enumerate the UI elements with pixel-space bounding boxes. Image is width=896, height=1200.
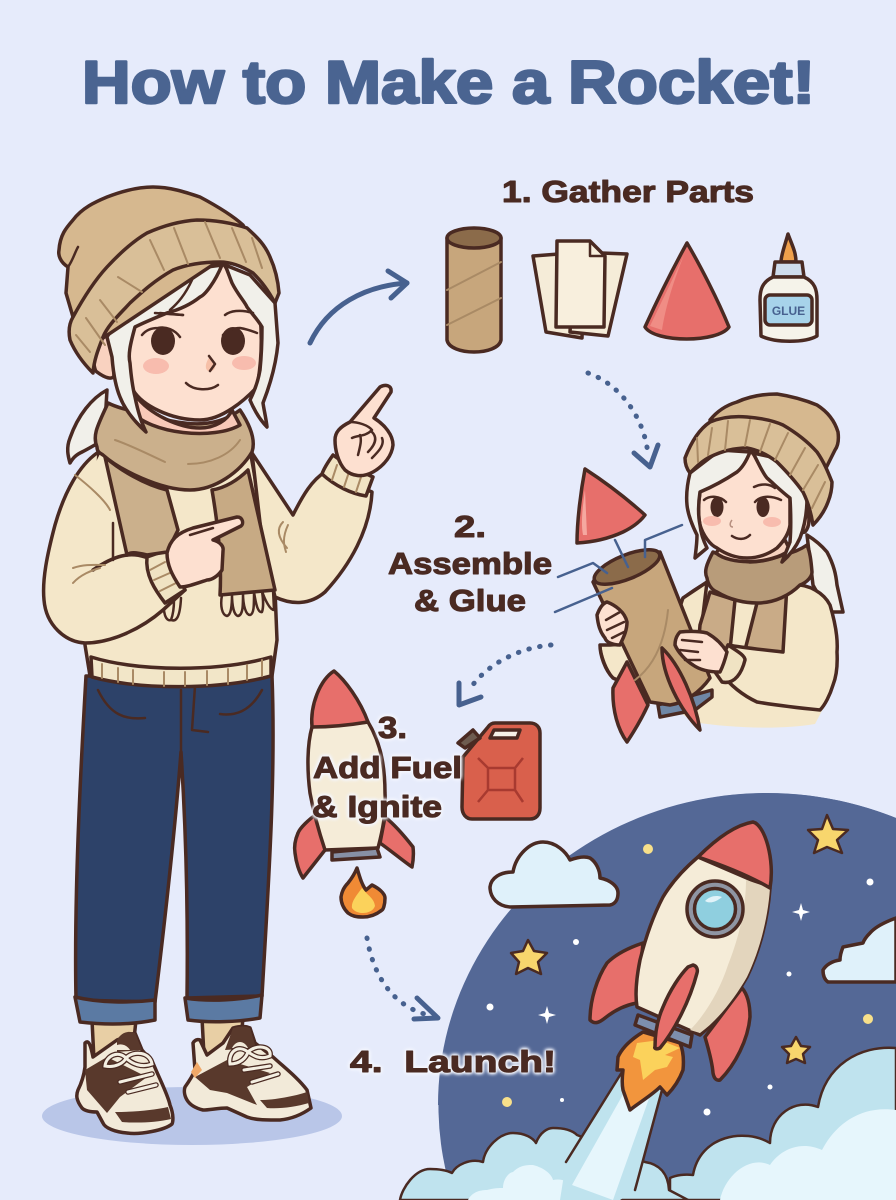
assembly motion lines xyxy=(555,525,682,612)
ground shadow xyxy=(42,1087,342,1145)
small beanie band xyxy=(685,417,832,525)
main character pointing xyxy=(42,187,393,1145)
rocket porthole xyxy=(687,881,743,937)
hand pointing up xyxy=(335,385,393,476)
rocket tube with fins xyxy=(590,543,712,742)
sleeve fold xyxy=(279,522,288,552)
beanie crease xyxy=(68,247,78,267)
icon: cardboard tube xyxy=(447,228,501,352)
heading: step 2: 2. xyxy=(454,509,486,544)
rocket body xyxy=(636,857,770,1035)
left arm xyxy=(44,453,185,643)
small face xyxy=(698,450,790,558)
icon: glue bottle xyxy=(760,234,817,341)
arrow: character to parts xyxy=(310,271,407,343)
small beanie crown xyxy=(710,394,838,470)
rocket nozzle xyxy=(635,1015,692,1047)
sweater hem xyxy=(91,657,271,687)
small ponytail xyxy=(807,535,843,612)
small torso xyxy=(640,585,825,728)
bottom right clouds xyxy=(670,1048,896,1200)
heading: step 1: 1. Gather Parts xyxy=(502,174,754,209)
hair xyxy=(107,265,278,432)
ponytail xyxy=(68,390,107,463)
dotted arrow: assemble to fuel xyxy=(459,645,551,705)
dotted arrow: fuel to launch xyxy=(367,938,438,1019)
hand pointing at self xyxy=(167,517,243,587)
beanie crown xyxy=(59,187,250,340)
icon: flame xyxy=(341,868,385,917)
ear xyxy=(94,335,114,378)
heading: step 4: 4. Launch! xyxy=(350,1044,556,1079)
sweater torso xyxy=(75,450,277,676)
night sky circle xyxy=(438,793,896,1200)
eyes xyxy=(142,311,257,355)
sparkles and dots xyxy=(486,844,874,1116)
rocket exhaust xyxy=(560,1072,662,1200)
rocket flame xyxy=(617,1032,683,1110)
small hanging scarf xyxy=(698,585,790,652)
bottom left clouds xyxy=(400,1128,688,1200)
right cuff xyxy=(322,455,373,496)
scarf xyxy=(95,403,275,616)
heading: step 2: Assemble xyxy=(388,546,552,581)
cloud over circle edge xyxy=(490,842,618,907)
socks xyxy=(92,1018,243,1060)
right cloud xyxy=(823,918,896,982)
heading: step 3: 3. xyxy=(378,710,407,745)
small hands xyxy=(597,602,727,672)
small rocket xyxy=(295,671,413,878)
icon: glue bottle: GLUE xyxy=(772,304,805,318)
right shoe xyxy=(184,1026,311,1120)
icon: red cone xyxy=(645,243,729,339)
body shading xyxy=(690,880,770,1033)
far sleeve outline xyxy=(600,582,707,678)
heading: step 3 xyxy=(312,710,462,824)
rocket right fin xyxy=(705,988,750,1080)
stars xyxy=(511,815,848,1063)
icon: paper sheets xyxy=(533,241,627,338)
neck xyxy=(130,395,240,433)
rocket left fin xyxy=(590,943,643,1023)
big rocket xyxy=(590,822,771,1110)
small cuff xyxy=(715,645,745,682)
face xyxy=(129,262,261,420)
small eyes and mouth xyxy=(703,484,781,539)
small sleeve xyxy=(720,585,837,710)
step 1 parts xyxy=(447,228,817,352)
nose and smile xyxy=(186,356,218,389)
small neck xyxy=(716,540,790,562)
heading: step 3: & Ignite xyxy=(312,789,442,824)
small ear xyxy=(795,508,809,534)
icon: fuel can xyxy=(458,723,540,819)
rocket nose xyxy=(698,822,771,888)
floating cone xyxy=(577,469,645,543)
title: How to Make a Rocket! xyxy=(82,49,815,116)
small character assembling xyxy=(555,394,843,742)
left cuff xyxy=(147,550,185,603)
right arm raised xyxy=(252,453,372,602)
heading: step 2: & Glue xyxy=(414,583,526,618)
left shoe xyxy=(77,1032,173,1133)
small hair xyxy=(687,450,807,562)
heading: step 2 xyxy=(388,509,552,618)
rocket center fin xyxy=(655,965,697,1049)
heading: step 3: Add Fuel xyxy=(313,750,462,785)
beanie band xyxy=(69,220,279,373)
cheeks xyxy=(143,356,256,374)
small scarf wrap xyxy=(706,545,812,603)
arm folds xyxy=(73,475,110,583)
dotted arrow: parts to assemble xyxy=(588,373,658,467)
space scene xyxy=(400,793,896,1200)
far sleeve xyxy=(600,582,707,700)
flame core xyxy=(633,1040,680,1080)
sky dome top xyxy=(438,793,896,1105)
left scarf fringe xyxy=(164,598,181,620)
jeans xyxy=(75,676,273,1024)
